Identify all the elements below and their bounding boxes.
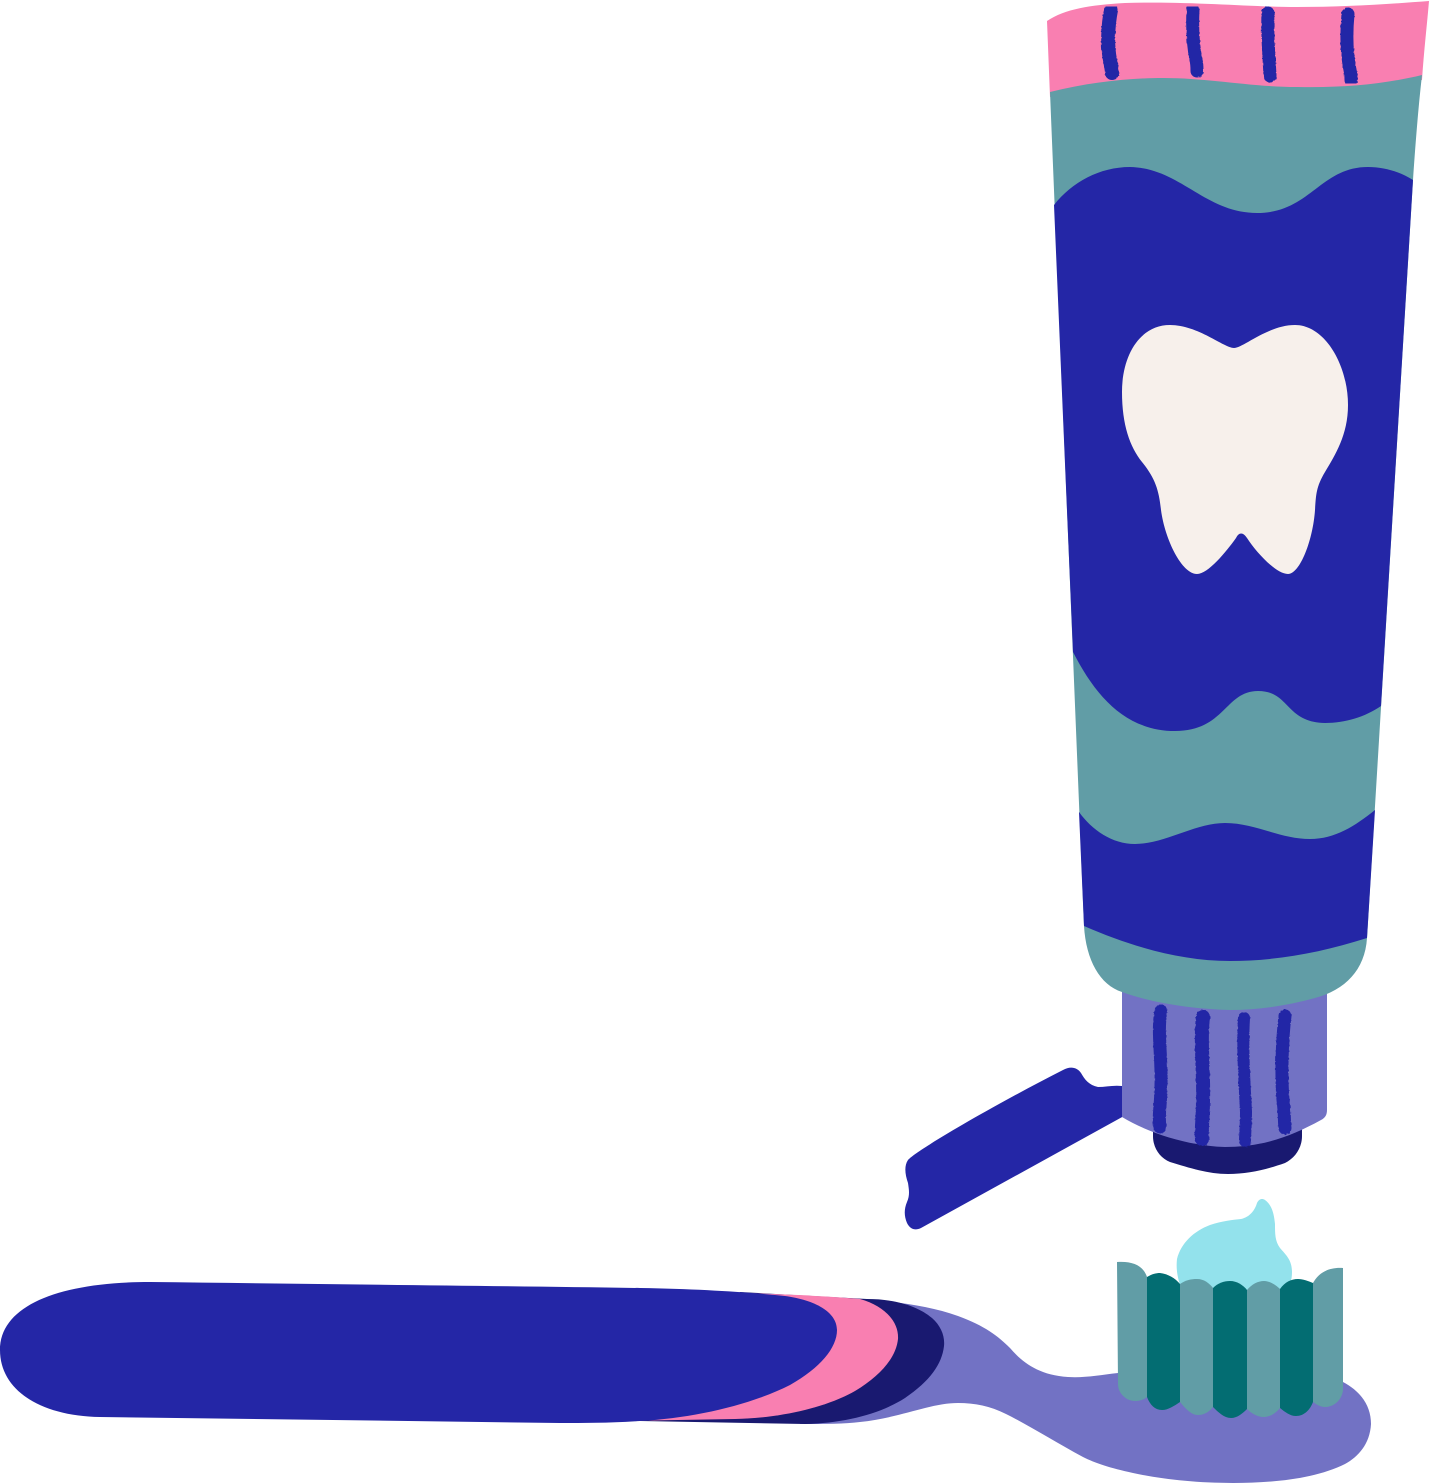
handle stripe: dark navy <box>640 1292 944 1424</box>
toothpaste tube <box>905 1 1429 1229</box>
nozzle collar <box>1122 985 1327 1147</box>
bristle 4 <box>1213 1281 1247 1418</box>
crimp ridges <box>1108 10 1351 80</box>
bristle 3 <box>1180 1279 1213 1415</box>
tube body: lower navy wave band <box>1079 810 1375 961</box>
tube crimp: pink <box>1047 1 1429 100</box>
bristle 1 <box>1117 1262 1147 1401</box>
handle: navy <box>0 1282 837 1423</box>
nozzle base shadow <box>1153 1125 1302 1174</box>
bristle 6 <box>1280 1279 1313 1416</box>
toothbrush <box>0 1199 1371 1483</box>
nozzle ridges <box>1159 1011 1285 1141</box>
toothpaste blob <box>1177 1199 1292 1292</box>
tube body: teal <box>1050 75 1422 1010</box>
icon: tooth <box>1122 325 1348 574</box>
removed cap flap <box>905 1068 1124 1229</box>
bristle 2 <box>1147 1273 1180 1410</box>
toothbrush neck and head <box>800 1299 1371 1483</box>
bristle 7 <box>1313 1268 1343 1407</box>
bristle 5 <box>1247 1281 1280 1417</box>
handle stripe: pink <box>620 1293 898 1421</box>
tube body: main navy wave band <box>1054 167 1413 731</box>
